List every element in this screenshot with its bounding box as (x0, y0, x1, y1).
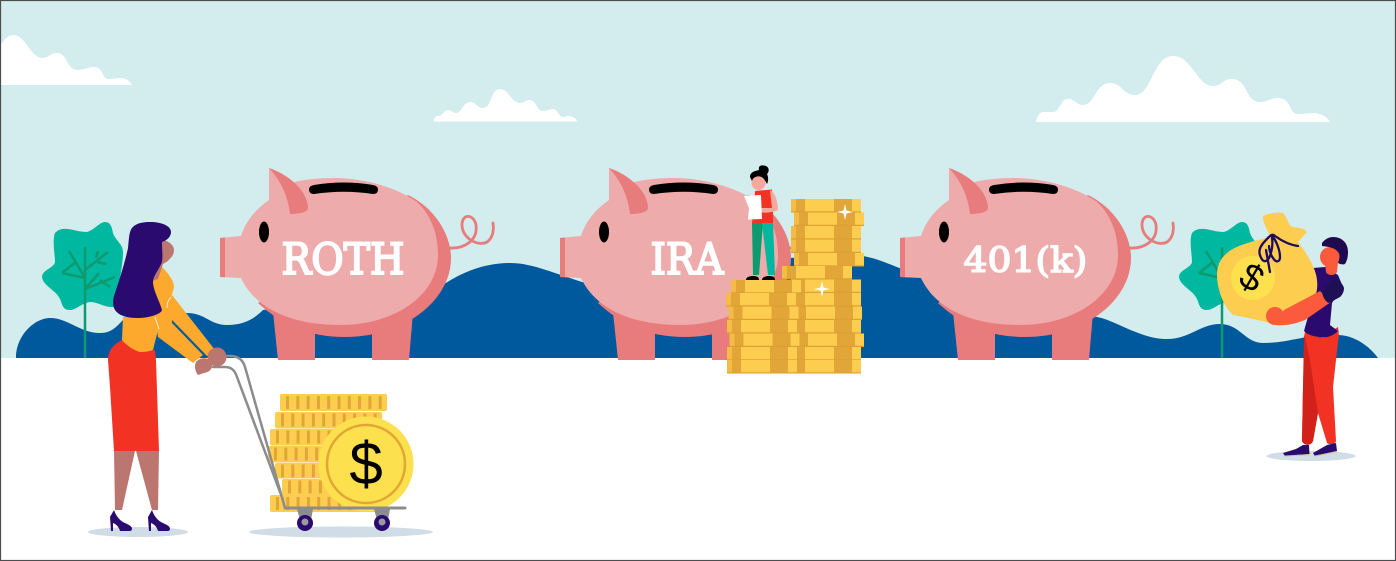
woman shadow (88, 527, 188, 537)
woman pushing cart (108, 222, 226, 531)
label 401(k): 401(k) (964, 241, 1088, 281)
coin stacks (726, 199, 864, 374)
small woman reading on coins (744, 165, 778, 280)
blue hills (16, 256, 1378, 358)
sparkle upper (837, 204, 853, 220)
stacked coins (268, 394, 387, 512)
tree right (1179, 222, 1260, 358)
big dollar coin: $ (349, 430, 383, 497)
piggy bank: ROTH (220, 168, 493, 360)
cart with coins (213, 356, 414, 531)
piggy bank: IRA (560, 168, 833, 360)
wheels (297, 515, 313, 531)
sparkle lower (814, 281, 830, 297)
big dollar coin (318, 416, 414, 512)
cloud left (1, 35, 132, 85)
background sky (0, 0, 1396, 358)
man shadow (1266, 451, 1356, 461)
man holding money bag (1283, 237, 1348, 456)
cart shadow (249, 526, 433, 538)
money bag: $ (1233, 255, 1271, 300)
label IRA: IRA (650, 235, 724, 285)
tree left (42, 222, 123, 358)
man's arm (1266, 278, 1344, 325)
cloud middle (434, 89, 577, 122)
money bag (1217, 213, 1317, 323)
label ROTH: ROTH (282, 235, 404, 285)
cloud right (1036, 56, 1330, 122)
cart handle and base (213, 356, 285, 508)
ground (0, 358, 1396, 561)
piggy bank: 401(k) (900, 168, 1173, 360)
